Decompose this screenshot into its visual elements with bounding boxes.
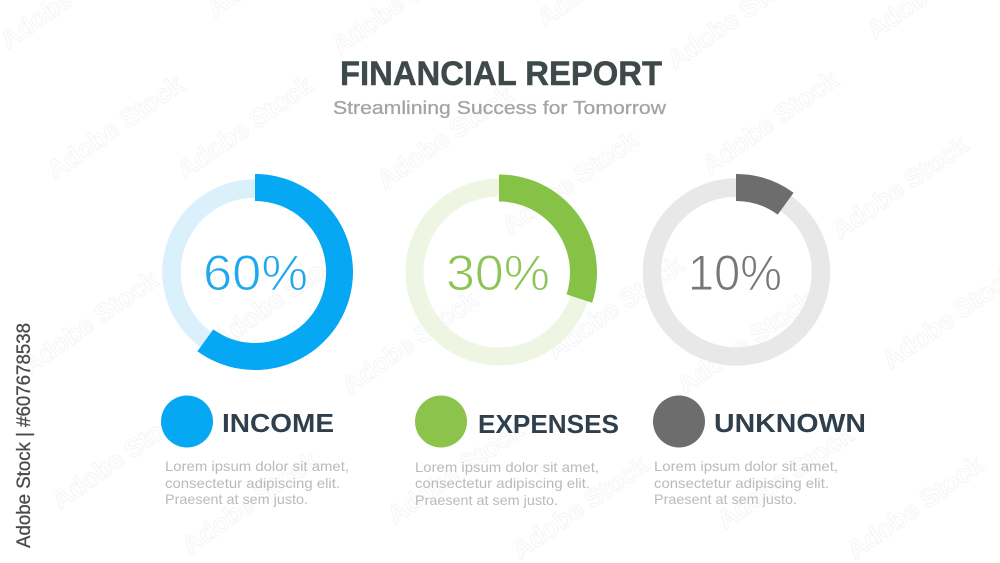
donut chart: income 60%: 60% — [203, 245, 308, 301]
watermark pattern: Adobe Stock — [506, 449, 654, 563]
watermark pattern: Adobe Stock — [46, 399, 194, 515]
expenses description — [415, 459, 599, 508]
watermark pattern: Adobe Stock — [206, 239, 354, 355]
watermark pattern: Adobe Stock — [826, 129, 974, 245]
watermark pattern: Adobe Stock — [381, 414, 529, 530]
panel: unknown — [652, 174, 866, 507]
panel: expenses — [414, 174, 619, 508]
unknown description: Lorem ipsum dolor sit amet, — [654, 458, 838, 474]
donut chart: income 60% — [172, 174, 353, 370]
donut chart: expenses 30%: 30% — [446, 245, 550, 301]
subtitle: Streamlining Success for Tomorrow — [333, 98, 667, 118]
unknown label: UNKNOWN — [714, 408, 866, 438]
income description: Praesent at sem justo. — [165, 491, 308, 507]
unknown description — [654, 458, 838, 507]
expenses description: consectetur adipiscing elit. — [415, 475, 590, 491]
watermark pattern: Adobe Stock — [541, 249, 689, 365]
icon: unknown legend dot — [653, 396, 705, 448]
unknown description: Praesent at sem justo. — [654, 491, 797, 507]
stock id side text: Adobe Stock | #607678538 — [14, 323, 35, 548]
donut chart: unknown 10%: 10% — [688, 245, 782, 301]
income label: INCOME — [222, 408, 334, 438]
watermark pattern: Adobe Stock — [841, 449, 989, 563]
income description: consectetur adipiscing elit. — [165, 475, 340, 491]
icon: income legend dot — [161, 396, 213, 448]
expenses description: Lorem ipsum dolor sit amet, — [415, 459, 599, 475]
watermark pattern: Adobe Stock — [371, 79, 519, 195]
unknown description: consectetur adipiscing elit. — [654, 475, 829, 491]
watermark pattern: Adobe Stock — [711, 419, 859, 535]
watermark pattern: Adobe Stock — [176, 444, 324, 560]
expenses description: Praesent at sem justo. — [415, 492, 558, 508]
watermark pattern: Adobe Stock — [171, 69, 319, 185]
watermark pattern: Adobe Stock — [16, 264, 164, 380]
donut chart: unknown 10% — [652, 174, 821, 356]
expenses label: EXPENSES — [478, 409, 619, 439]
title: FINANCIAL REPORT — [340, 55, 662, 93]
donut chart: expenses 30% — [414, 174, 597, 356]
watermark pattern: Adobe Stock — [496, 124, 644, 240]
icon: expenses legend dot — [415, 396, 467, 448]
watermark pattern: Adobe Stock — [41, 69, 189, 185]
watermark pattern: Adobe Stock — [671, 284, 819, 400]
income description — [165, 458, 349, 507]
watermark pattern: Adobe Stock — [696, 64, 844, 180]
income description: Lorem ipsum dolor sit amet, — [165, 458, 349, 474]
watermark pattern: Adobe Stock — [336, 284, 484, 400]
panel: income — [161, 174, 353, 507]
